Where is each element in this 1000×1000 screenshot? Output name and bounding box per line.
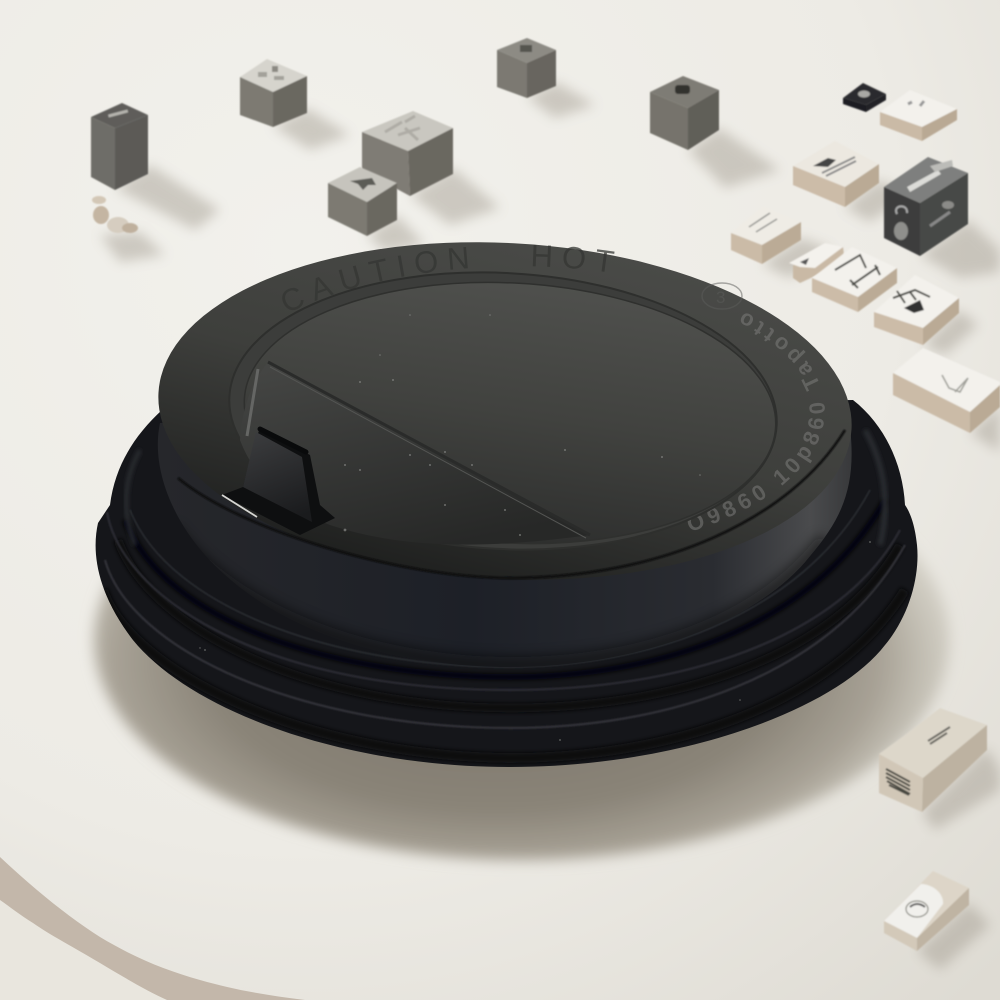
card: small dark tile [843,83,886,112]
embossed text: lid code: O9860 10p860 Tapotto [688,314,825,530]
recycling mark [702,283,742,309]
sip opening segment [240,362,590,545]
box: white label box [884,871,969,951]
recessed groove [222,259,784,563]
card: tile with dark tool drawing [874,275,959,345]
block: grey cube upper left [240,59,307,127]
lid top rim surface [150,225,860,597]
stones [92,196,138,233]
recycling mark: 3 [716,288,725,307]
diagonal highlight [270,367,586,538]
coffee lid [96,242,918,767]
block: tall grey cube [91,103,148,190]
lid outer flange [80,390,930,780]
card: small folded tile [789,243,845,283]
sip spout [222,428,335,535]
block shadows [100,82,1000,970]
slit highlight [247,369,258,436]
recessed top panel [238,269,782,557]
box: beige box with stripes [879,708,987,812]
diagonal groove [268,362,590,535]
embossed text: caution hot: CAUTION HOT [282,244,614,310]
block: wide grey cube [362,111,453,196]
lid dome wall [158,407,852,667]
block: dark cube with label [884,157,968,256]
tan band at the table edge [0,857,305,1000]
surface specks [199,314,871,741]
block: top centre cube [497,38,556,98]
card: large right tile [893,348,1000,433]
card: tile with line drawings [812,247,897,312]
block: grey cube with dark top icon [650,76,719,150]
card: top right tile [880,90,957,141]
wall bottom shading [170,530,825,665]
card: tile with dark drawing [793,141,879,207]
block: front grey cube [328,167,397,236]
lid ground shadow [94,420,950,860]
rim dark lower edge [178,430,845,578]
surface below the band [0,900,167,1000]
card: left tile [731,206,801,264]
